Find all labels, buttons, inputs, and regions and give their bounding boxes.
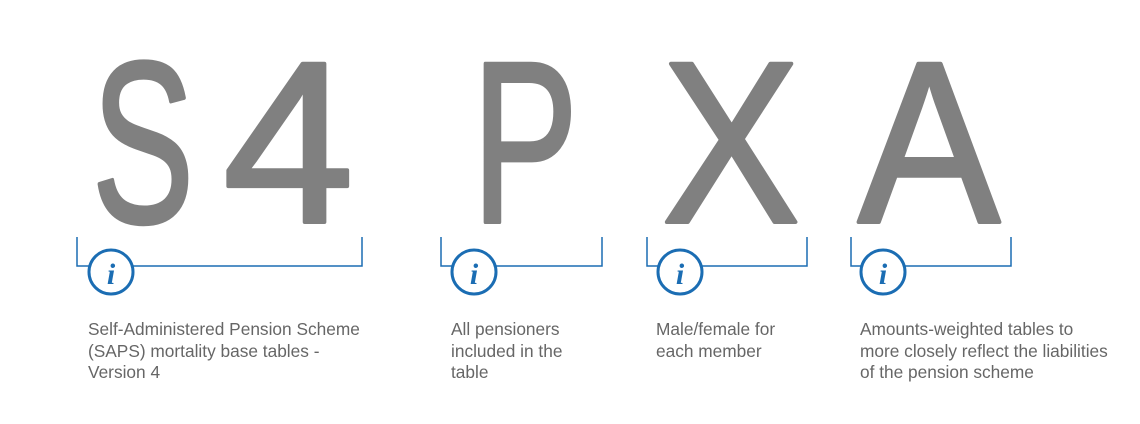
text: S4 description: (SAPS) mortality base tables - — [88, 340, 319, 360]
text: X description — [656, 319, 775, 360]
text: P description: included in the — [451, 340, 562, 360]
icon: info 3 — [658, 250, 702, 294]
icon: info 2 — [452, 250, 496, 294]
text: A description: of the pension scheme — [860, 362, 1034, 382]
text: P description: All pensioners — [451, 319, 560, 339]
text: P description — [451, 319, 562, 382]
text: X description: Male/female for — [656, 319, 775, 339]
icon: info 1: i — [107, 258, 116, 291]
icon: info 4: i — [879, 258, 888, 291]
text: S4 description: Self-Administered Pension Scheme — [88, 319, 360, 339]
icon: info 1 — [89, 250, 133, 294]
icon: info 4 — [861, 250, 905, 294]
letter P: P — [472, 14, 578, 271]
bracket 2 — [441, 237, 602, 266]
text: A description: more closely reflect the liabilities — [860, 340, 1108, 360]
letter 4: 4 — [223, 14, 354, 271]
bracket 1 — [77, 237, 362, 266]
icon: info 2: i — [470, 258, 479, 291]
text: P description: table — [451, 362, 488, 382]
text: S4 description: Version 4 — [88, 362, 160, 382]
letter A: A — [858, 14, 1000, 271]
letter S: S — [92, 14, 194, 271]
text: A description — [860, 319, 1108, 382]
bracket 3 — [647, 237, 807, 266]
icon: info 3: i — [676, 258, 685, 291]
text: X description: each member — [656, 340, 762, 360]
bracket 4 — [851, 237, 1011, 266]
text: S4 description — [88, 319, 360, 382]
text: A description: Amounts-weighted tables to — [860, 319, 1073, 339]
letter X: X — [662, 14, 800, 271]
